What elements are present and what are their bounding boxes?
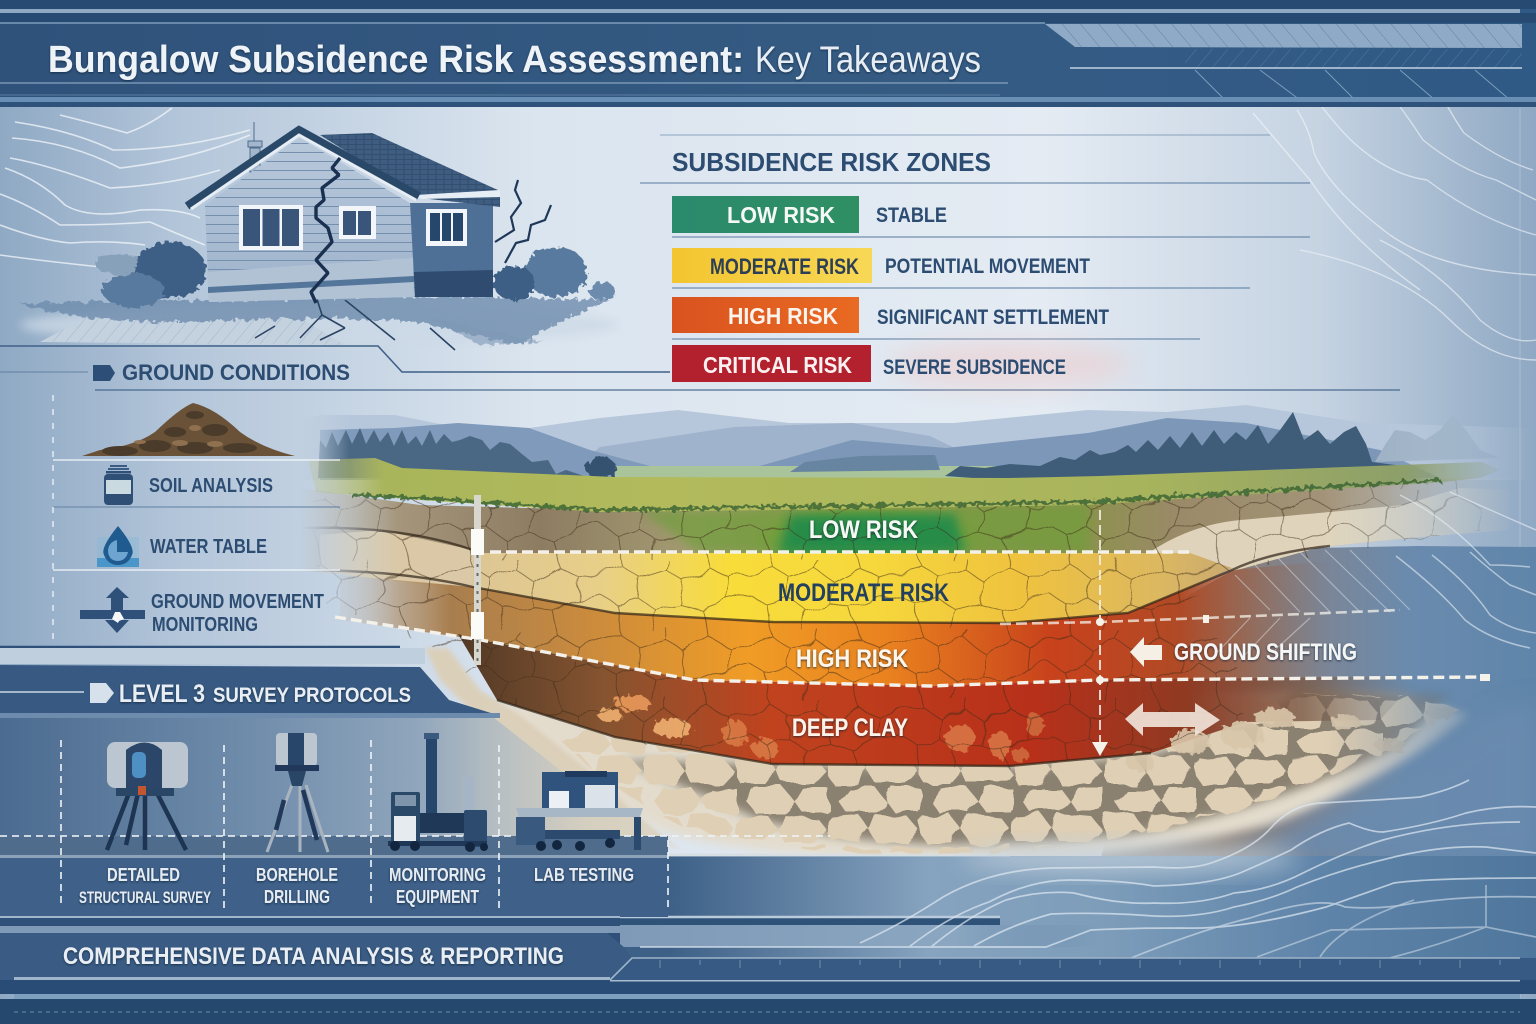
side wall	[408, 203, 493, 297]
banner heading: SURVEY PROTOCOLS	[213, 684, 411, 707]
risk row: high: HIGH RISK	[728, 303, 838, 329]
left sidebar items	[0, 395, 400, 647]
risk row: high	[672, 297, 1109, 333]
caption: borehole drilling	[256, 865, 338, 907]
low risk green zone	[640, 504, 1090, 553]
soil cross-section	[300, 478, 1510, 860]
blue ground right of soil	[1100, 546, 1536, 860]
distant mountains and trees	[300, 405, 1536, 480]
meadow horizon	[615, 466, 997, 478]
ground conditions heading rule lines	[0, 346, 1400, 390]
icon: water table	[97, 526, 139, 567]
near mountains right	[710, 418, 1440, 480]
roof	[320, 133, 500, 207]
grass strip	[308, 458, 1500, 512]
caption: monitoring equipment: MONITORING	[389, 865, 486, 885]
soil analysis label: SOIL ANALYSIS	[149, 475, 273, 497]
contour lines: lower right	[640, 780, 1536, 958]
icon: soil jar	[104, 465, 133, 505]
arrow and label: ground shifting: GROUND SHIFTING	[1174, 639, 1357, 666]
beige strata	[320, 488, 1510, 590]
strata lines	[300, 528, 1330, 766]
contour lines: right of soil	[1396, 492, 1536, 648]
icon: lab testing bench	[516, 771, 643, 851]
pale fractured rock layer	[425, 648, 1470, 860]
soil mound	[82, 403, 295, 456]
icon: ground movement	[80, 587, 145, 633]
footer	[0, 916, 1536, 1024]
icon: monitoring equipment	[388, 733, 488, 852]
main crack	[311, 158, 340, 303]
rock blobs in clay	[598, 695, 1044, 762]
title band	[0, 0, 1536, 107]
ground band and caption band	[0, 836, 668, 856]
bushes	[95, 242, 615, 307]
low distant trees	[790, 455, 940, 472]
ground and lawn	[20, 293, 620, 350]
icon: borehole drilling rig	[267, 733, 328, 852]
footer banner text: COMPREHENSIVE DATA ANALYSIS & REPORTING	[63, 943, 564, 970]
risk row: moderate: POTENTIAL MOVEMENT	[885, 255, 1090, 278]
dark gaps between rocks	[620, 690, 1450, 845]
heading: risk zones: SUBSIDENCE RISK ZONES	[672, 147, 991, 177]
front wall	[205, 138, 415, 302]
risk row: low: STABLE	[876, 204, 947, 227]
middle mountain range	[595, 423, 953, 466]
banner icon	[90, 683, 114, 703]
banner	[0, 665, 491, 713]
caption: lab testing: LAB TESTING	[534, 865, 634, 885]
caption: detailed structural survey: DETAILED	[107, 865, 180, 885]
risk row: low: LOW RISK	[727, 202, 835, 228]
contour lines: upper left	[0, 108, 250, 270]
risk layer labels: HIGH RISK	[796, 645, 908, 673]
rock cells	[560, 695, 1460, 853]
risk layer labels	[778, 516, 949, 742]
blue haze over right rock edge	[1230, 700, 1536, 860]
left tree line	[318, 428, 590, 478]
risk layer labels: LOW RISK	[809, 516, 918, 544]
borehole probe	[471, 495, 484, 665]
risk layer labels: MODERATE RISK	[778, 579, 949, 607]
topsoil layer	[310, 479, 1471, 572]
high risk layer	[340, 560, 1340, 686]
subtitle: key takeaways: Key Takeaways	[755, 39, 981, 80]
ground movement monitoring label: MONITORING	[152, 614, 258, 636]
small round tree	[586, 457, 616, 479]
double arrow: clay movement	[1125, 703, 1220, 736]
contour lines: upper right	[1253, 100, 1536, 1000]
crack texture	[310, 480, 1480, 766]
depth marker arrow	[1092, 615, 1490, 756]
gable trim	[187, 130, 419, 206]
side cracks	[495, 180, 551, 263]
sand fog	[490, 690, 1470, 860]
risk layer labels: DEEP CLAY	[792, 714, 908, 742]
window left	[239, 205, 303, 250]
far mountain range	[300, 405, 1536, 480]
risk row: critical: SEVERE SUBSIDENCE	[883, 356, 1066, 379]
risk row: moderate	[672, 248, 1090, 283]
caption: borehole drilling: BOREHOLE	[256, 865, 338, 885]
caption: monitoring equipment	[389, 865, 486, 907]
boundary dashed lines	[335, 510, 1482, 745]
caption: detailed structural survey	[79, 865, 211, 907]
risk row: critical	[672, 341, 1130, 389]
title: Bungalow Subsidence Risk Assessment:	[48, 39, 744, 81]
low risk core	[778, 514, 965, 553]
caption: borehole drilling: DRILLING	[264, 887, 330, 907]
icon: laser scanner	[107, 742, 188, 850]
moderate risk layer	[473, 553, 1232, 623]
caption: detailed structural survey: STRUCTURAL SURVEY	[79, 888, 211, 907]
window right	[426, 209, 467, 246]
caption: monitoring equipment: EQUIPMENT	[396, 887, 479, 907]
panel background	[0, 717, 668, 917]
ground movement monitoring label: GROUND MOVEMENT	[151, 591, 324, 613]
panel: subsidence risk zones	[640, 135, 1310, 389]
chimney	[248, 122, 262, 172]
sand slope	[425, 648, 680, 850]
house illustration	[20, 122, 620, 350]
panel: level 3 survey protocols	[0, 648, 830, 917]
near mountains left	[320, 423, 660, 480]
window middle	[339, 206, 376, 239]
deep clay layer	[458, 634, 1420, 766]
risk row: low	[672, 196, 947, 233]
risk row: moderate: MODERATE RISK	[710, 254, 859, 279]
risk row: critical: CRITICAL RISK	[703, 352, 852, 378]
heading: ground conditions: GROUND CONDITIONS	[122, 360, 350, 385]
water table label: WATER TABLE	[150, 536, 267, 558]
lower blue ground bands	[600, 843, 1536, 959]
ground movement monitoring label	[151, 591, 324, 636]
right clay rocks	[1126, 706, 1455, 772]
far right grey trees	[1375, 426, 1484, 462]
arrow and label: ground shifting	[1130, 637, 1357, 667]
right tree line	[945, 412, 1403, 480]
risk row: high: SIGNIFICANT SETTLEMENT	[877, 306, 1109, 329]
diagonal hatch over ground shift zone	[1210, 550, 1410, 660]
banner heading: LEVEL 3	[119, 680, 205, 708]
